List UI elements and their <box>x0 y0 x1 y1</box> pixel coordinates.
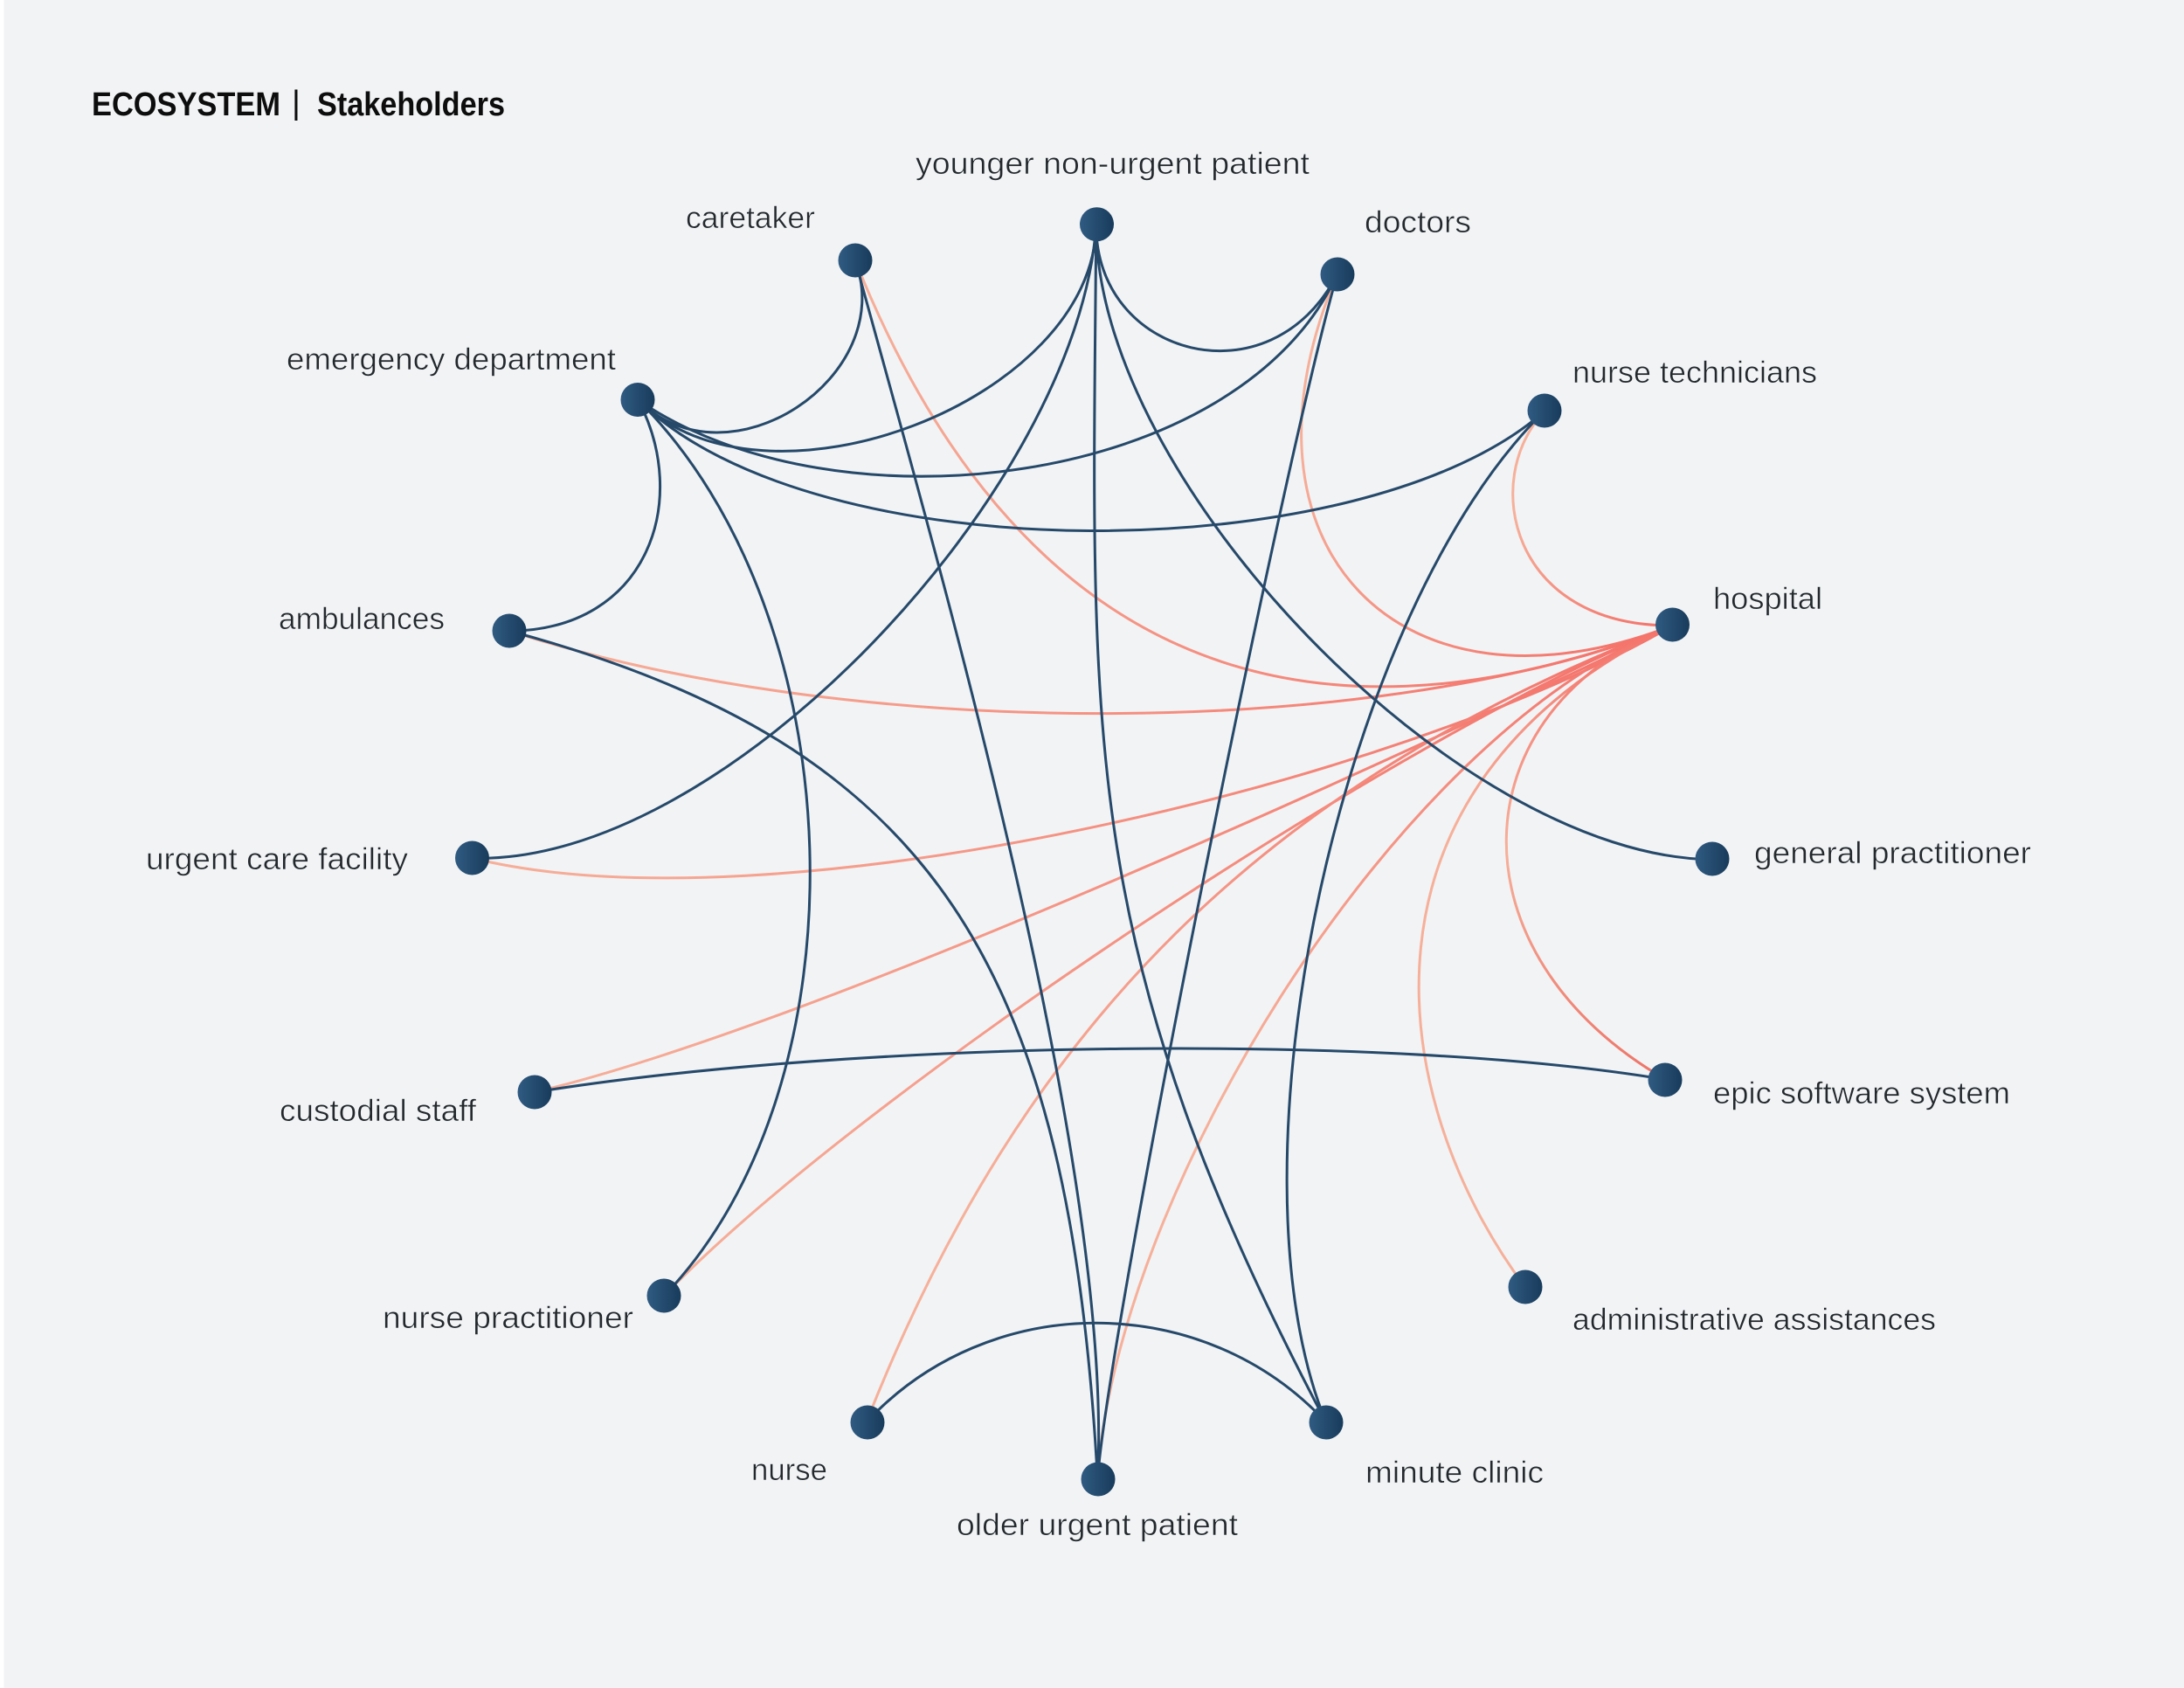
link: custodial staff to epic software system <box>535 1048 1666 1092</box>
link: emergency department to ambulances <box>510 400 660 631</box>
link: emergency department to nurse practitioner <box>638 400 810 1296</box>
link: custodial staff to hospital <box>535 626 1673 1092</box>
link: nurse to hospital <box>867 626 1673 1422</box>
label: older urgent patient: older urgent patient <box>957 1508 1238 1542</box>
label: hospital: hospital <box>1713 582 1822 616</box>
connections: other stakeholder links (navy) <box>473 225 1712 1479</box>
link: nurse technicians to minute clinic <box>1287 411 1545 1422</box>
title: | <box>292 85 301 121</box>
link: ambulances to hospital <box>510 626 1673 714</box>
link: administrative assistances to hospital <box>1419 626 1673 1287</box>
link: ambulances to older patient <box>510 631 1097 1479</box>
title: Stakeholders <box>317 86 505 123</box>
node: nurse <box>851 1405 884 1440</box>
node: doctors <box>1321 257 1354 292</box>
link: doctors to emergency department <box>638 274 1337 476</box>
label: emergency department: emergency department <box>287 342 616 377</box>
link: younger patient to emergency department <box>638 225 1096 451</box>
link: younger patient to general practitioner <box>1096 225 1712 860</box>
node: nurse practitioner <box>646 1279 681 1312</box>
label: general practitioner: general practitioner <box>1754 836 2031 870</box>
link: nurse to minute clinic <box>867 1323 1326 1422</box>
connections: hospital links (coral) <box>473 260 1673 1479</box>
label: ambulances: ambulances <box>279 602 445 636</box>
label: custodial staff: custodial staff <box>280 1094 476 1128</box>
link: younger patient to doctors <box>1096 225 1337 351</box>
title: ECOSYSTEM <box>92 86 280 123</box>
link: younger patient to minute clinic <box>1095 225 1326 1422</box>
label: minute clinic: minute clinic <box>1365 1456 1544 1490</box>
node labels <box>146 147 2031 1542</box>
node: nurse technicians <box>1527 393 1562 428</box>
node: custodial staff <box>517 1075 552 1110</box>
label: doctors: doctors <box>1365 205 1471 239</box>
link: older urgent patient to hospital <box>1097 626 1673 1479</box>
title <box>92 85 505 123</box>
link: caretaker to emergency department <box>638 260 862 432</box>
label: caretaker: caretaker <box>686 201 815 235</box>
label: nurse practitioner: nurse practitioner <box>383 1301 633 1335</box>
label: epic software system: epic software system <box>1713 1076 2010 1110</box>
node: caretaker <box>839 243 872 278</box>
label: urgent care facility: urgent care facility <box>146 842 409 876</box>
link: younger patient to urgent care facility <box>473 225 1096 858</box>
link: epic software system to hospital <box>1506 626 1673 1080</box>
link: caretaker to older patient <box>855 260 1099 1479</box>
node: older urgent patient <box>1082 1463 1115 1496</box>
node: minute clinic <box>1309 1405 1344 1440</box>
node: epic software system <box>1648 1062 1683 1097</box>
node: general practitioner <box>1695 842 1730 875</box>
label: administrative assistances: administrative assistances <box>1572 1303 1936 1337</box>
label: nurse: nurse <box>751 1453 827 1487</box>
link: caretaker to hospital <box>855 260 1673 687</box>
link: nurse technicians to hospital <box>1513 411 1673 626</box>
node: hospital <box>1655 608 1690 641</box>
link: doctors to older patient <box>1097 274 1337 1479</box>
label: younger non-urgent patient: younger non-urgent patient <box>916 147 1310 181</box>
node: emergency department <box>620 383 655 417</box>
link: doctors to hospital <box>1302 274 1673 655</box>
link: urgent care facility to hospital <box>473 626 1673 878</box>
node: administrative assistances <box>1508 1270 1543 1304</box>
link: nurse technicians to emergency department <box>638 400 1545 530</box>
node: ambulances <box>493 613 526 648</box>
node: younger non-urgent patient <box>1080 207 1114 241</box>
nodes <box>455 207 1730 1497</box>
link: nurse practitioner to hospital <box>665 626 1673 1296</box>
node: urgent care facility <box>455 841 489 875</box>
label: nurse technicians: nurse technicians <box>1572 356 1817 390</box>
